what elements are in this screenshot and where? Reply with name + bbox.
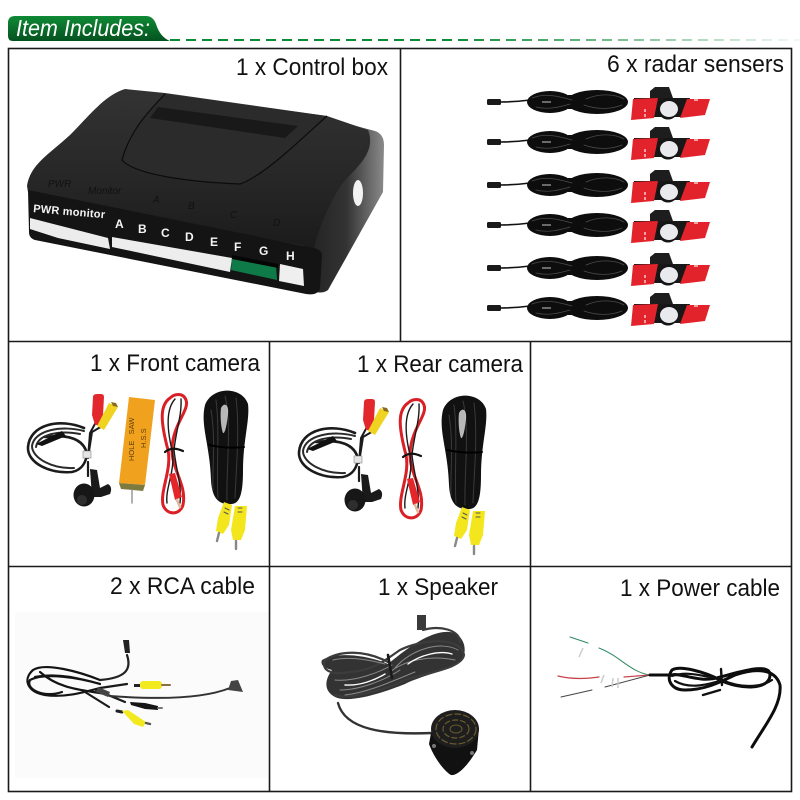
label: rear camera: 1 x Rear camera bbox=[357, 351, 524, 378]
icon: control box unit: B bbox=[138, 222, 147, 236]
panel: rear camera bbox=[299, 351, 524, 554]
icon: orange hole saw box: H.S.S bbox=[139, 428, 148, 448]
icon: control box unit: Monitor bbox=[88, 186, 122, 197]
icon: control box unit: H bbox=[286, 249, 295, 263]
label: control box: 1 x Control box bbox=[236, 54, 388, 81]
icon: orange hole saw box: HOLE SAW bbox=[127, 417, 136, 461]
icon: sensor 6 bbox=[487, 293, 710, 326]
panel: control box bbox=[27, 54, 388, 294]
icon: power lead bbox=[400, 400, 425, 518]
icon: sensor 2 bbox=[487, 127, 710, 160]
icon: control box unit: G bbox=[259, 244, 268, 258]
icon: control box unit: D bbox=[185, 230, 194, 244]
icon: sensor 5 bbox=[487, 253, 710, 286]
icon: camera with cable bbox=[28, 394, 118, 506]
header: item includes banner bbox=[8, 15, 800, 41]
panel: power cable bbox=[558, 575, 780, 747]
icon: control box unit: C bbox=[161, 226, 170, 240]
icon: control box unit: E bbox=[210, 235, 218, 249]
icon: rca cable bundle bbox=[27, 640, 243, 727]
icon: control box unit: PWR monitor bbox=[33, 203, 106, 221]
icon: power cable bbox=[558, 637, 780, 747]
label: speaker: 1 x Speaker bbox=[378, 574, 498, 601]
icon: rca video cable bbox=[442, 396, 486, 554]
icon: control box unit: PWR bbox=[48, 179, 71, 190]
panel: rca cable bbox=[15, 573, 268, 778]
label: radar sensors: 6 x radar sensers bbox=[607, 51, 784, 78]
icon: power lead bbox=[162, 394, 187, 513]
icon: control box unit: D bbox=[273, 218, 280, 229]
icon: sensor 3 bbox=[487, 170, 710, 203]
icon: sensor 4 bbox=[487, 210, 710, 243]
header: item includes banner: Item Includes: bbox=[16, 15, 150, 41]
icon: rca video cable bbox=[204, 391, 248, 549]
icon: control box unit bbox=[27, 89, 384, 294]
label: rca cable: 2 x RCA cable bbox=[110, 573, 255, 600]
label: front camera: 1 x Front camera bbox=[90, 350, 261, 377]
icon: control box unit: A bbox=[115, 217, 124, 231]
panel: speaker bbox=[321, 574, 498, 775]
label: power cable: 1 x Power cable bbox=[620, 575, 780, 602]
panel: front camera bbox=[28, 350, 261, 549]
icon: camera with cable bbox=[299, 399, 389, 512]
icon: control box unit: C bbox=[230, 210, 238, 221]
icon: control box unit: B bbox=[188, 201, 195, 212]
icon: control box unit: F bbox=[234, 240, 241, 254]
icon: control box unit: A bbox=[152, 195, 160, 206]
panel: radar sensors bbox=[487, 51, 784, 326]
icon: orange hole saw box bbox=[119, 397, 155, 503]
photo backdrop bbox=[15, 612, 268, 778]
icon: speaker with cable bbox=[321, 615, 479, 775]
icon: sensor 1 bbox=[487, 87, 710, 120]
